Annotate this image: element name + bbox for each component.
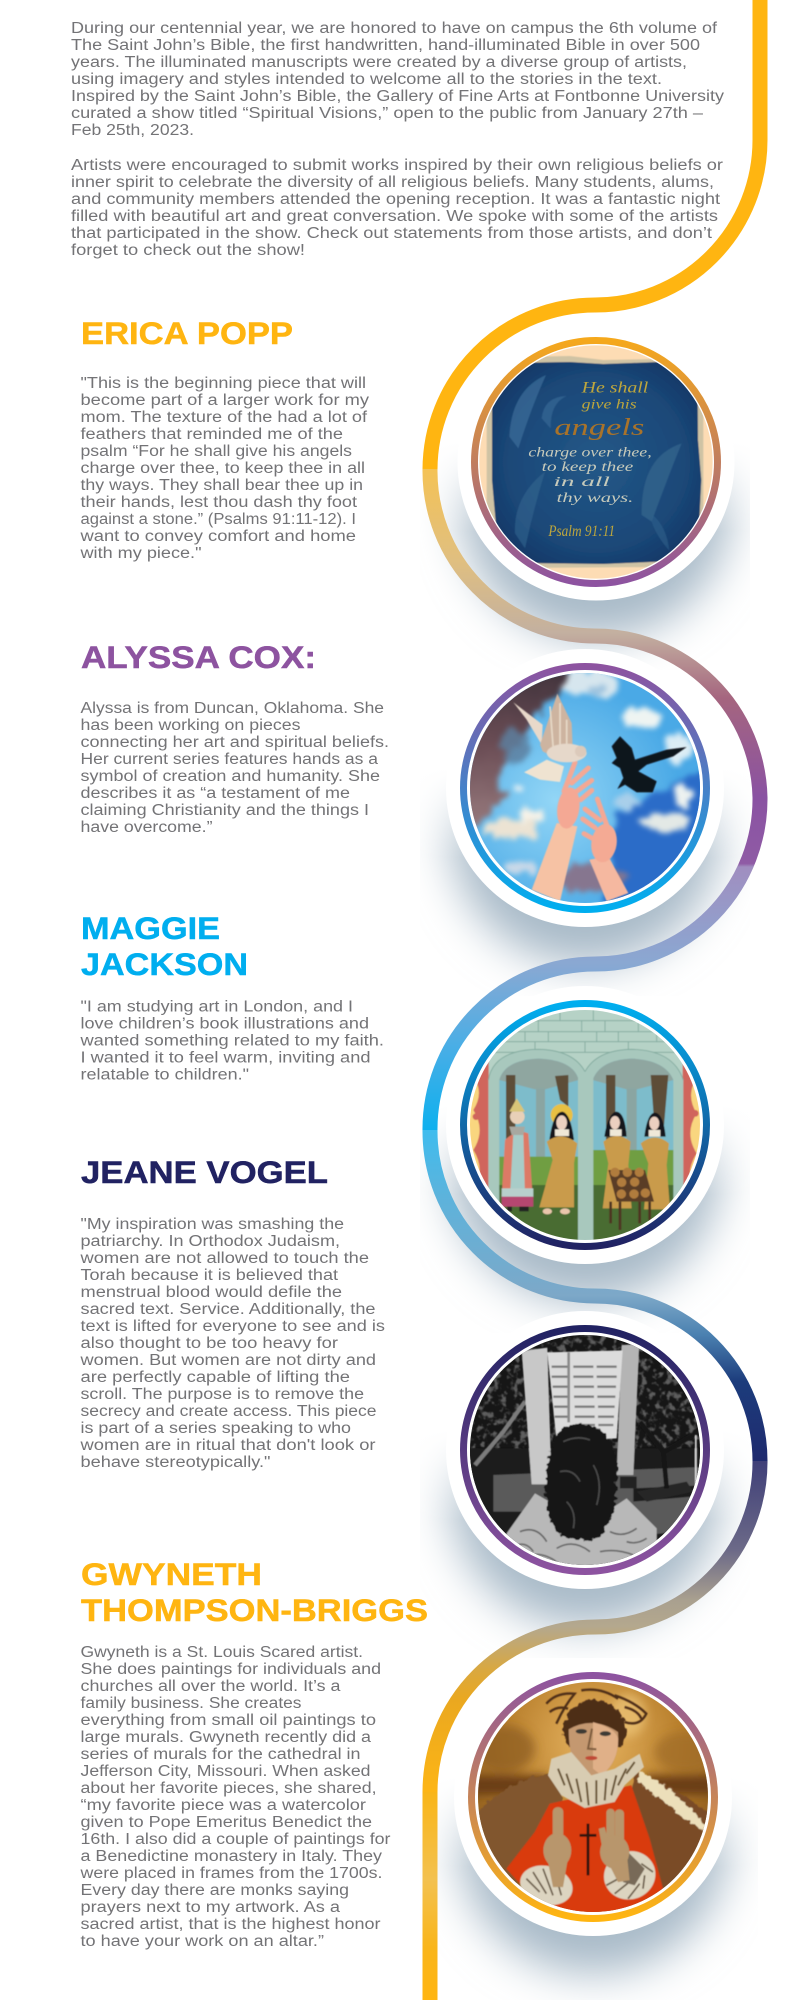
text: Jeane Vogel statement: patriarchy. In Orthodox Judaism, — [80, 1233, 340, 1250]
text: Erica Popp statement: "This is the beginning piece that will — [80, 375, 366, 392]
heading: Alyssa Cox: ALYSSA COX: — [81, 639, 316, 675]
intro text block: The Saint John’s Bible, the first handwritten, hand-illuminated Bible in over 500 — [71, 37, 700, 54]
text: Erica Popp statement: become part of a larger work for my — [80, 392, 369, 409]
intro text block: forget to check out the show! — [71, 242, 305, 259]
shadow: portrait 4 — [425, 1457, 744, 1652]
text: Erica Popp statement — [79, 375, 369, 562]
intro text block: Inspired by the Saint John’s Bible, the Gallery of Fine Arts at Fontbonne University — [71, 88, 724, 105]
heading: Gwyneth Thompson-Briggs — [81, 1556, 428, 1628]
text: Erica Popp statement: thy ways. They shall bear thee up in — [80, 477, 363, 494]
text: Jeane Vogel statement: text is lifted for everyone to see and is — [80, 1318, 385, 1335]
heading: Erica Popp: ERICA POPP — [81, 315, 293, 351]
text: Maggie Jackson statement — [79, 998, 384, 1084]
text: Jeane Vogel statement: behave stereotypically." — [80, 1454, 270, 1471]
intro text block: Feb 25th, 2023. — [71, 122, 194, 139]
text: Gwyneth Thompson-Briggs statement: about her favorite pieces, she shared, — [80, 1780, 376, 1797]
text: Gwyneth Thompson-Briggs statement: were placed in frames from the 1700s. — [79, 1865, 383, 1882]
text: Erica Popp statement: charge over thee, to keep thee in all — [80, 460, 365, 477]
text: Jeane Vogel statement: women are in ritual that don't look or — [79, 1437, 375, 1454]
text: Gwyneth Thompson-Briggs statement: Jefferson City, Missouri. When asked — [80, 1763, 370, 1780]
text: Gwyneth Thompson-Briggs statement: large murals. Gwyneth recently did a — [80, 1729, 371, 1746]
text: Maggie Jackson statement: "I am studying art in London, and I — [80, 998, 353, 1016]
portrait 1: cyanotype angels artwork: He shall — [580, 380, 648, 397]
heading: Gwyneth Thompson-Briggs: THOMPSON-BRIGGS — [81, 1592, 428, 1628]
text: Jeane Vogel statement — [79, 1216, 385, 1471]
intro text block: using imagery and styles intended to welcome all to the stories in the text. — [71, 71, 662, 88]
text: Gwyneth Thompson-Briggs statement: to have your work on an altar.” — [80, 1933, 324, 1950]
intro text block: During our centennial year, we are honored to have on campus the 6th volume of — [71, 20, 718, 37]
intro text block: curated a show titled “Spiritual Visions,” open to the public from January 27th – — [71, 105, 703, 122]
intro text block: Artists were encouraged to submit works inspired by their own religious beliefs or — [71, 157, 723, 174]
text: Jeane Vogel statement: sacred text. Service. Additionally, the — [80, 1301, 376, 1318]
portrait 1: cyanotype angels artwork: thy ways. — [557, 490, 633, 505]
shadow: portrait 5 — [438, 1804, 752, 2000]
text: Erica Popp statement: with my piece." — [79, 545, 202, 562]
text: Jeane Vogel statement: are perfectly capable of lifting the — [80, 1369, 350, 1386]
portrait 2: dove and raven with reaching hands — [446, 649, 724, 927]
portrait 5: child with crown of thorns and red robe — [454, 1658, 732, 1936]
text: Alyssa Cox statement: Her current series features hands as a — [80, 751, 378, 768]
text: Alyssa Cox statement — [80, 700, 389, 836]
winding timeline ribbon — [430, 0, 760, 2000]
text: Gwyneth Thompson-Briggs statement: Every day there are monks saying — [80, 1882, 349, 1899]
shadow: portrait 2 — [425, 795, 744, 988]
text: Gwyneth Thompson-Briggs statement — [79, 1644, 391, 1950]
text: Erica Popp statement: their hands, lest thou dash thy foot — [80, 494, 358, 511]
text: Alyssa Cox statement: describes it as “a testament of me — [80, 785, 350, 802]
heading: Maggie Jackson: JACKSON — [81, 946, 248, 982]
heading: Jeane Vogel: JEANE VOGEL — [81, 1154, 328, 1190]
portrait 1: cyanotype angels artwork — [458, 324, 734, 600]
text: Alyssa Cox statement: Alyssa is from Duncan, Oklahoma. She — [80, 700, 384, 717]
text: Jeane Vogel statement: women are not allowed to touch the — [79, 1250, 369, 1267]
text: Gwyneth Thompson-Briggs statement: 16th. I also did a couple of paintings for — [80, 1831, 390, 1848]
text: Alyssa Cox statement: have overcome.” — [80, 819, 212, 836]
text: Gwyneth Thompson-Briggs statement: churches all over the world. It’s a — [80, 1678, 341, 1695]
text: Maggie Jackson statement: I wanted it to feel warm, inviting and — [80, 1050, 370, 1066]
text: Jeane Vogel statement: menstrual blood would defile the — [80, 1284, 342, 1301]
portrait 4: woman lifting a Torah scroll — [446, 1311, 724, 1589]
text: Jeane Vogel statement: is part of a series speaking to who — [80, 1420, 351, 1437]
text: Erica Popp statement: psalm “For he shall give his angels — [80, 443, 352, 460]
portrait 1: cyanotype angels artwork: in all — [553, 474, 611, 489]
text: Gwyneth Thompson-Briggs statement: family business. She creates — [80, 1695, 302, 1712]
text: Gwyneth Thompson-Briggs statement: everything from small oil paintings to — [80, 1712, 376, 1729]
heading: Maggie Jackson: MAGGIE — [81, 910, 220, 946]
portrait 1: cyanotype angels artwork: angels — [554, 415, 644, 441]
heading: Maggie Jackson — [81, 910, 248, 982]
text: Erica Popp statement: against a stone.” (Psalms 91:11-12). I — [80, 511, 356, 528]
heading: Gwyneth Thompson-Briggs: GWYNETH — [81, 1556, 262, 1592]
text: Alyssa Cox statement: connecting her art and spiritual beliefs. — [80, 734, 389, 751]
text: Alyssa Cox statement: has been working on pieces — [80, 717, 301, 734]
text: Gwyneth Thompson-Briggs statement: series of murals for the cathedral in — [80, 1746, 360, 1763]
intro text block: and community members attended the opening reception. It was a fantastic night — [71, 191, 721, 208]
portrait 1: cyanotype angels artwork: to keep thee — [542, 459, 633, 474]
shadow: portrait 1 — [440, 468, 750, 659]
text: Jeane Vogel statement: secrecy and create access. This piece — [80, 1403, 376, 1420]
intro text block: that participated in the show. Check out statements from those artists, and don’t — [71, 225, 713, 242]
intro text block: inner spirit to celebrate the diversity of all religious beliefs. Many students, alums, — [71, 174, 714, 191]
text: Gwyneth Thompson-Briggs statement: She does paintings for individuals and — [80, 1661, 381, 1678]
text: Gwyneth Thompson-Briggs statement: prayers next to my artwork. As a — [80, 1899, 340, 1916]
text: Erica Popp statement: mom. The texture of the had a lot of — [80, 409, 368, 426]
text: Jeane Vogel statement: "My inspiration was smashing the — [80, 1216, 344, 1233]
text: Gwyneth Thompson-Briggs statement: “my favorite piece was a watercolor — [80, 1797, 366, 1814]
shadow: portrait 3 — [425, 1132, 744, 1320]
intro text block: filled with beautiful art and great conversation. We spoke with some of the artists — [71, 208, 718, 225]
intro text block: years. The illuminated manuscripts were created by a diverse group of artists, — [71, 54, 687, 71]
intro text block — [71, 20, 724, 259]
text: Alyssa Cox statement: symbol of creation and humanity. She — [80, 768, 380, 785]
text: Erica Popp statement: want to convey comfort and home — [79, 528, 356, 545]
portrait 1: cyanotype angels artwork: give his — [582, 396, 637, 411]
text: Gwyneth Thompson-Briggs statement: given to Pope Emeritus Benedict the — [80, 1814, 372, 1831]
text: Gwyneth Thompson-Briggs statement: sacred artist, that is the highest honor — [80, 1916, 380, 1933]
text: Erica Popp statement: feathers that reminded me of the — [80, 426, 343, 443]
text: Alyssa Cox statement: claiming Christianity and the things I — [80, 802, 369, 819]
text: Jeane Vogel statement: scroll. The purpose is to remove the — [80, 1386, 364, 1403]
text: Maggie Jackson statement: relatable to children." — [80, 1066, 249, 1084]
text: Jeane Vogel statement: women. But women are not dirty and — [79, 1352, 376, 1369]
text: Maggie Jackson statement: love children’s book illustrations and — [80, 1016, 369, 1032]
text: Jeane Vogel statement: also thought to be too heavy for — [80, 1335, 338, 1352]
portrait 1: cyanotype angels artwork: charge over thee, — [528, 445, 652, 460]
portrait 1: cyanotype angels artwork: Psalm 91:11 — [547, 523, 615, 540]
text: Maggie Jackson statement: wanted something related to my faith. — [79, 1032, 384, 1050]
portrait 3: illustrated saints in a cloister — [446, 986, 724, 1264]
text: Jeane Vogel statement: Torah because it is believed that — [80, 1267, 339, 1284]
text: Gwyneth Thompson-Briggs statement: a Benedictine monastery in Italy. They — [80, 1848, 382, 1865]
text: Gwyneth Thompson-Briggs statement: Gwyneth is a St. Louis Scared artist. — [80, 1644, 363, 1661]
